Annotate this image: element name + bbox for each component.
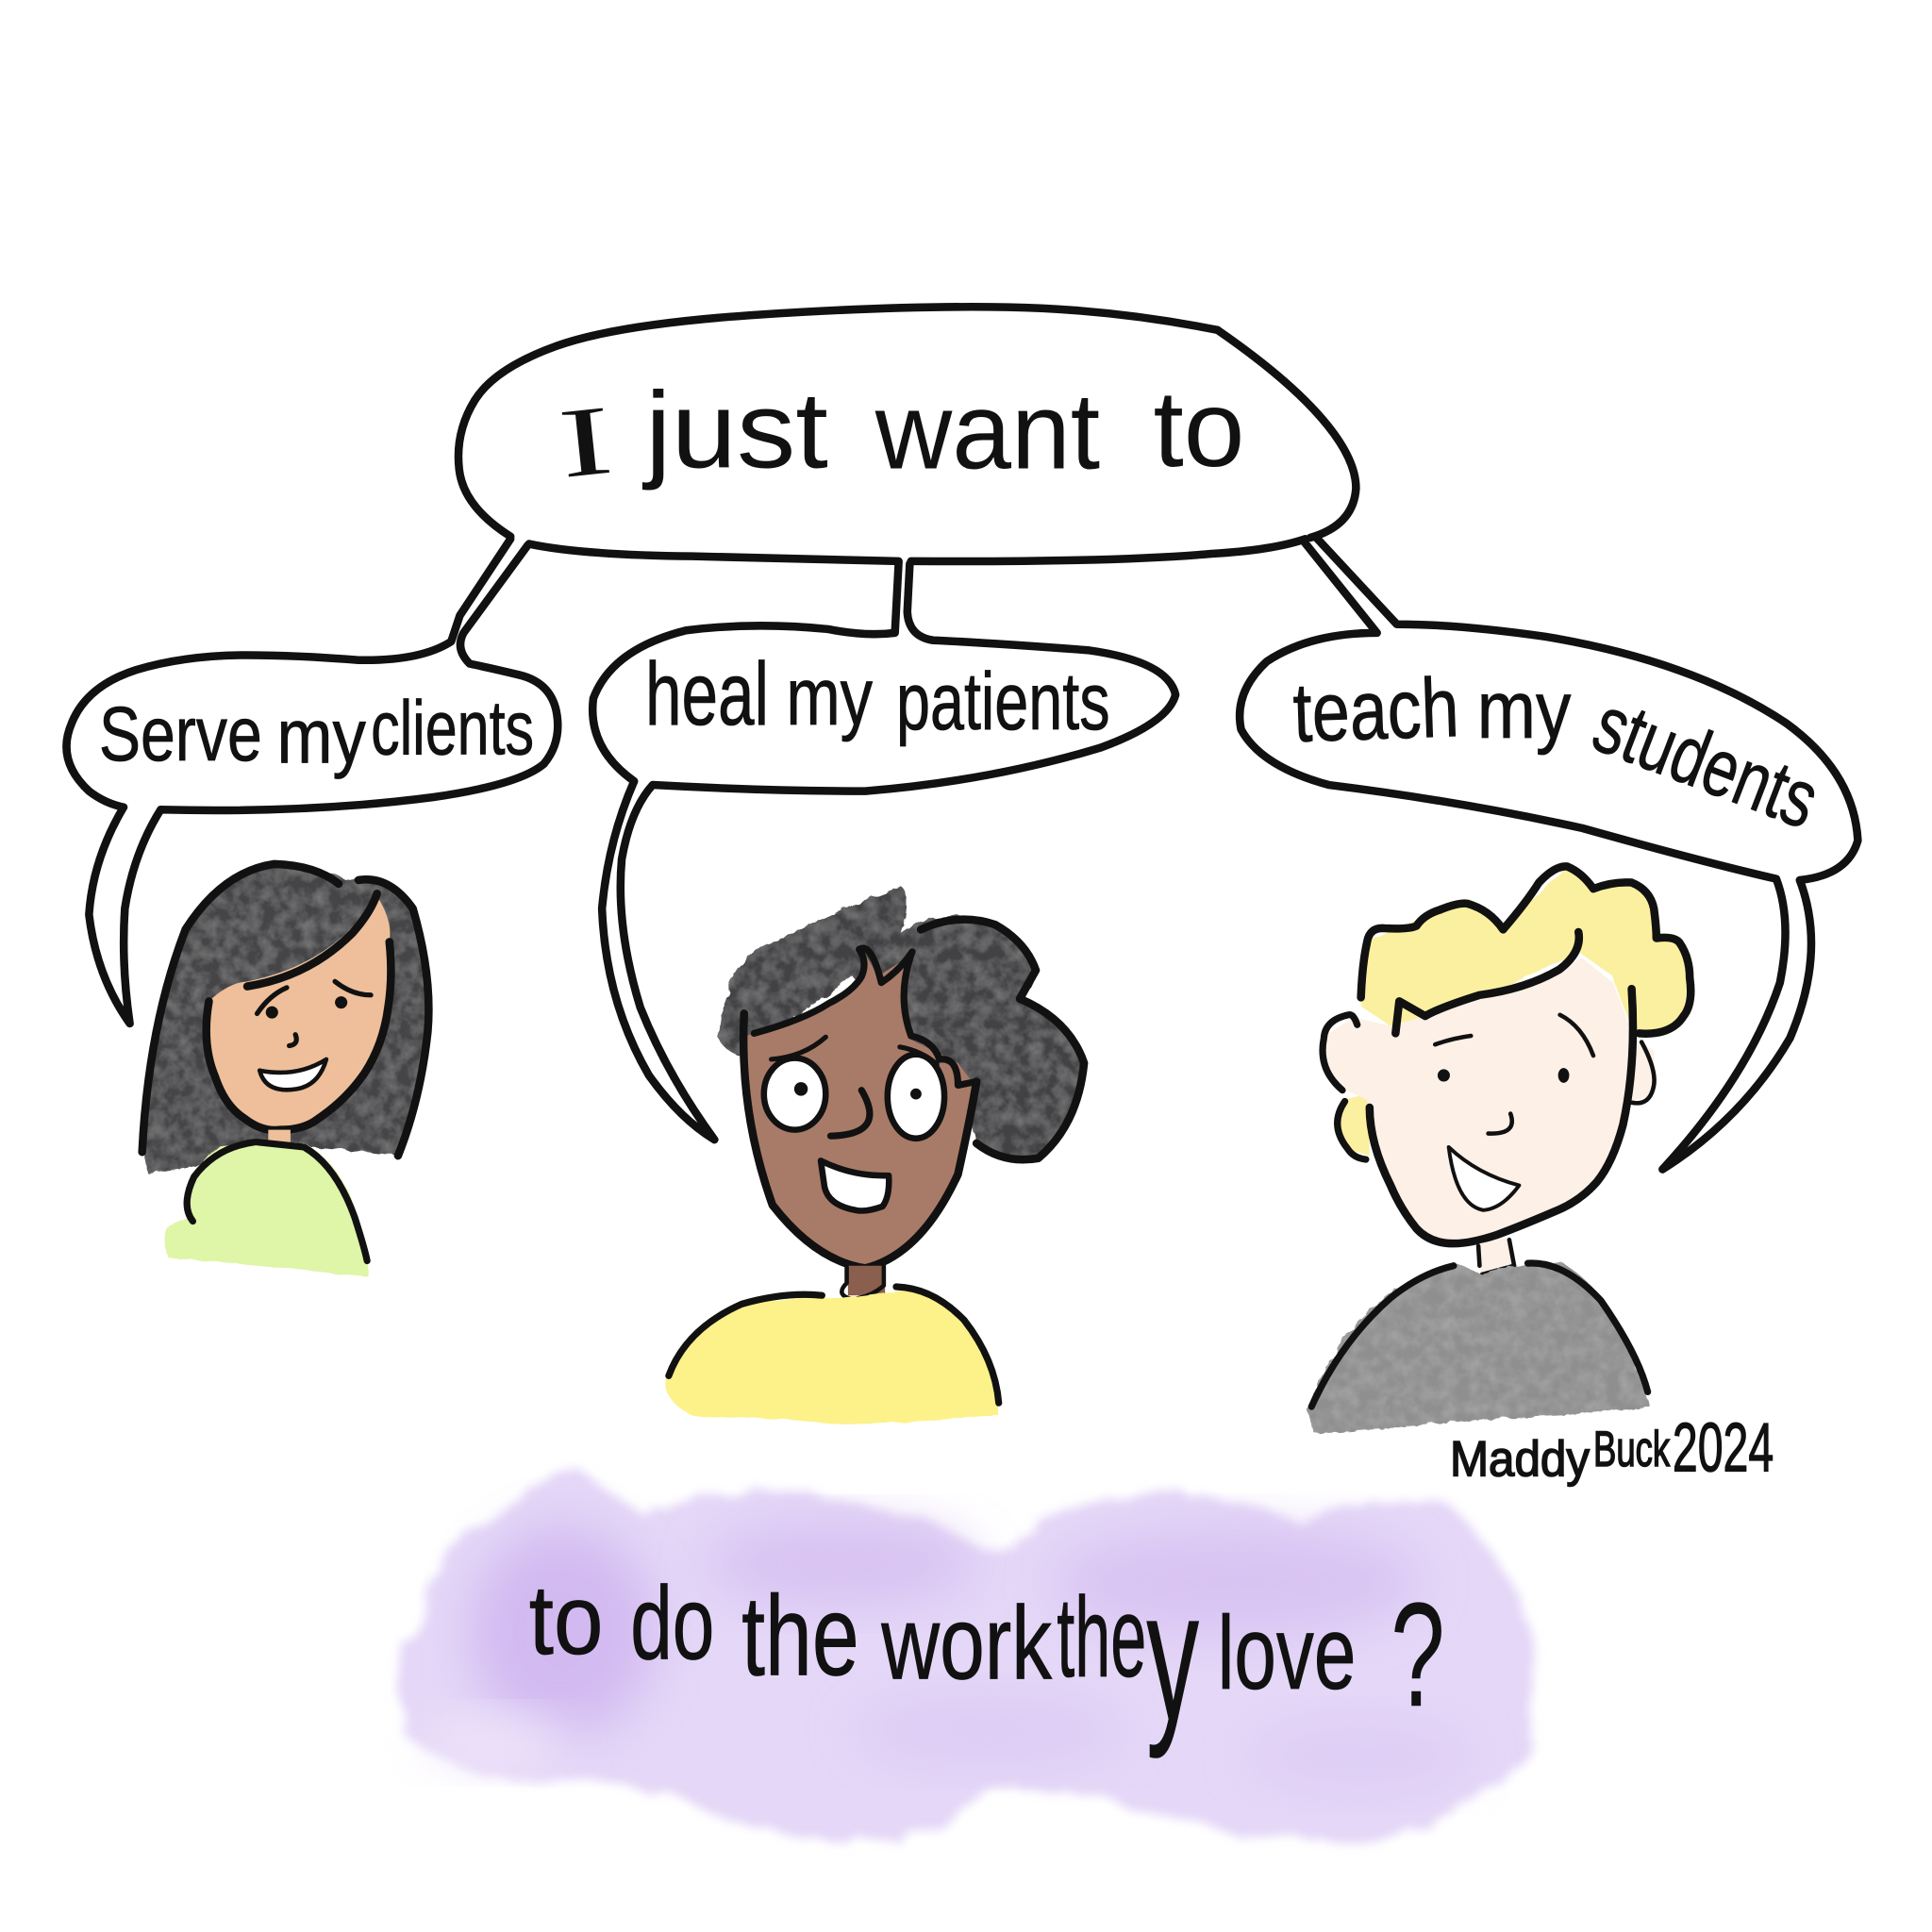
bubble text: heal my patients: my (786, 652, 874, 742)
bubble text: teach my students: students (1582, 679, 1830, 846)
neck (841, 1266, 885, 1299)
signature: Maddy Buck 2024: 2024 (1673, 1408, 1774, 1486)
face (1323, 958, 1654, 1243)
bubble text: Serve my clients: clients (371, 685, 534, 771)
heading: I just want to: to (1154, 369, 1244, 490)
hair (1338, 867, 1690, 1156)
signature: Maddy Buck 2024 (1450, 1408, 1774, 1487)
mouth (259, 1059, 326, 1090)
watercolor wash (399, 1471, 1538, 1844)
mouth (821, 1160, 889, 1211)
hair (142, 863, 428, 1174)
character: man with curly blond hair and grey top (1307, 866, 1690, 1434)
signature: Maddy Buck 2024: Buck (1593, 1423, 1671, 1477)
mouth (1449, 1147, 1519, 1210)
yellow top (665, 1287, 999, 1424)
right speech bubble: teach my students (1240, 537, 1857, 1170)
character: woman with long dark hair and green top (142, 863, 428, 1277)
eyes (764, 1037, 944, 1139)
heading: I just want to: I (554, 385, 617, 499)
question text: do (630, 1565, 714, 1681)
face (743, 947, 976, 1268)
purple watercolor panel with closing question (399, 1471, 1538, 1844)
grey top (1307, 1263, 1650, 1434)
heading: I just want to: want (874, 372, 1100, 492)
bubble text: Serve my clients: my (277, 693, 366, 779)
bubble text: Serve my clients (99, 685, 534, 779)
green top (165, 1142, 368, 1277)
question text: the (741, 1572, 859, 1699)
question text: the (1057, 1574, 1215, 1701)
signature: Maddy Buck 2024: Maddy (1450, 1432, 1591, 1487)
character: woman with curly hair and yellow top (665, 886, 1084, 1424)
left speech bubble: serve my clients (66, 539, 558, 1024)
neck (1478, 1238, 1514, 1274)
bubble text: teach my students: my (1477, 665, 1572, 756)
question text: love (1218, 1595, 1356, 1711)
bubble text: heal my patients: heal (645, 644, 769, 743)
question text: to (529, 1565, 603, 1675)
question text: y (1146, 1552, 1199, 1759)
hair (720, 886, 1084, 1159)
main speech bubble: I just want to (458, 307, 1356, 561)
neck (268, 1130, 291, 1147)
bubble text: teach my students (1291, 659, 1830, 846)
question text: work (880, 1585, 1053, 1701)
bubble text: teach my students: teach (1291, 659, 1460, 759)
question text (529, 1552, 1445, 1759)
bubble text: heal my patients (645, 644, 1110, 747)
middle speech bubble: heal my patients (592, 562, 1175, 1140)
bubble text: Serve my clients: Serve (99, 691, 262, 777)
heading: I just want to (554, 369, 1244, 499)
facial features (1435, 1015, 1593, 1134)
question text: ? (1391, 1573, 1445, 1738)
face (207, 893, 391, 1130)
bubble text: heal my patients: patients (896, 657, 1110, 747)
heading: I just want to: just (642, 370, 828, 491)
hair and face outlines (1323, 866, 1690, 1243)
